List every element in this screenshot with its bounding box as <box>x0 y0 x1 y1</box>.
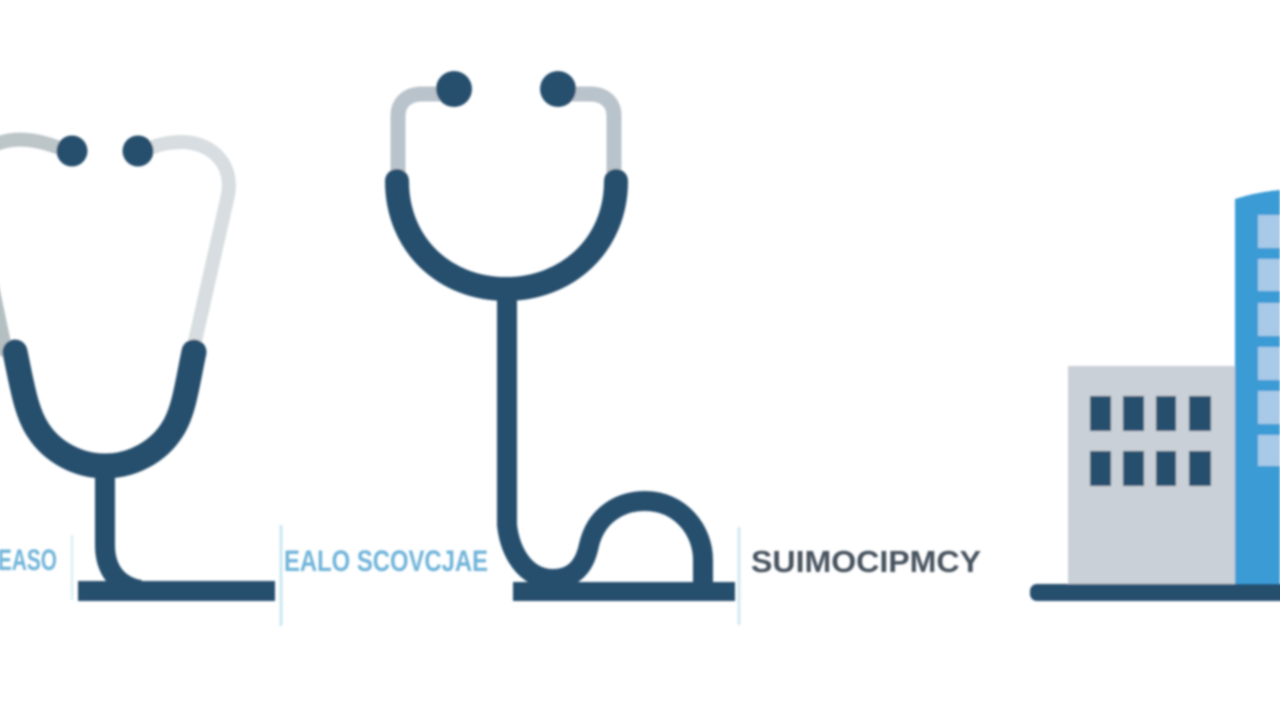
icon: left stethoscope <box>0 136 275 601</box>
icon: center stethoscope <box>397 71 735 601</box>
label: left fragment <box>0 535 72 600</box>
icon: hospital building <box>1030 190 1280 601</box>
label: center-right text: SUIMOCIPMCY <box>751 544 981 579</box>
label: center-left text: EALO SCOVCJAE <box>284 545 488 578</box>
label: left fragment: EASO <box>0 544 57 577</box>
